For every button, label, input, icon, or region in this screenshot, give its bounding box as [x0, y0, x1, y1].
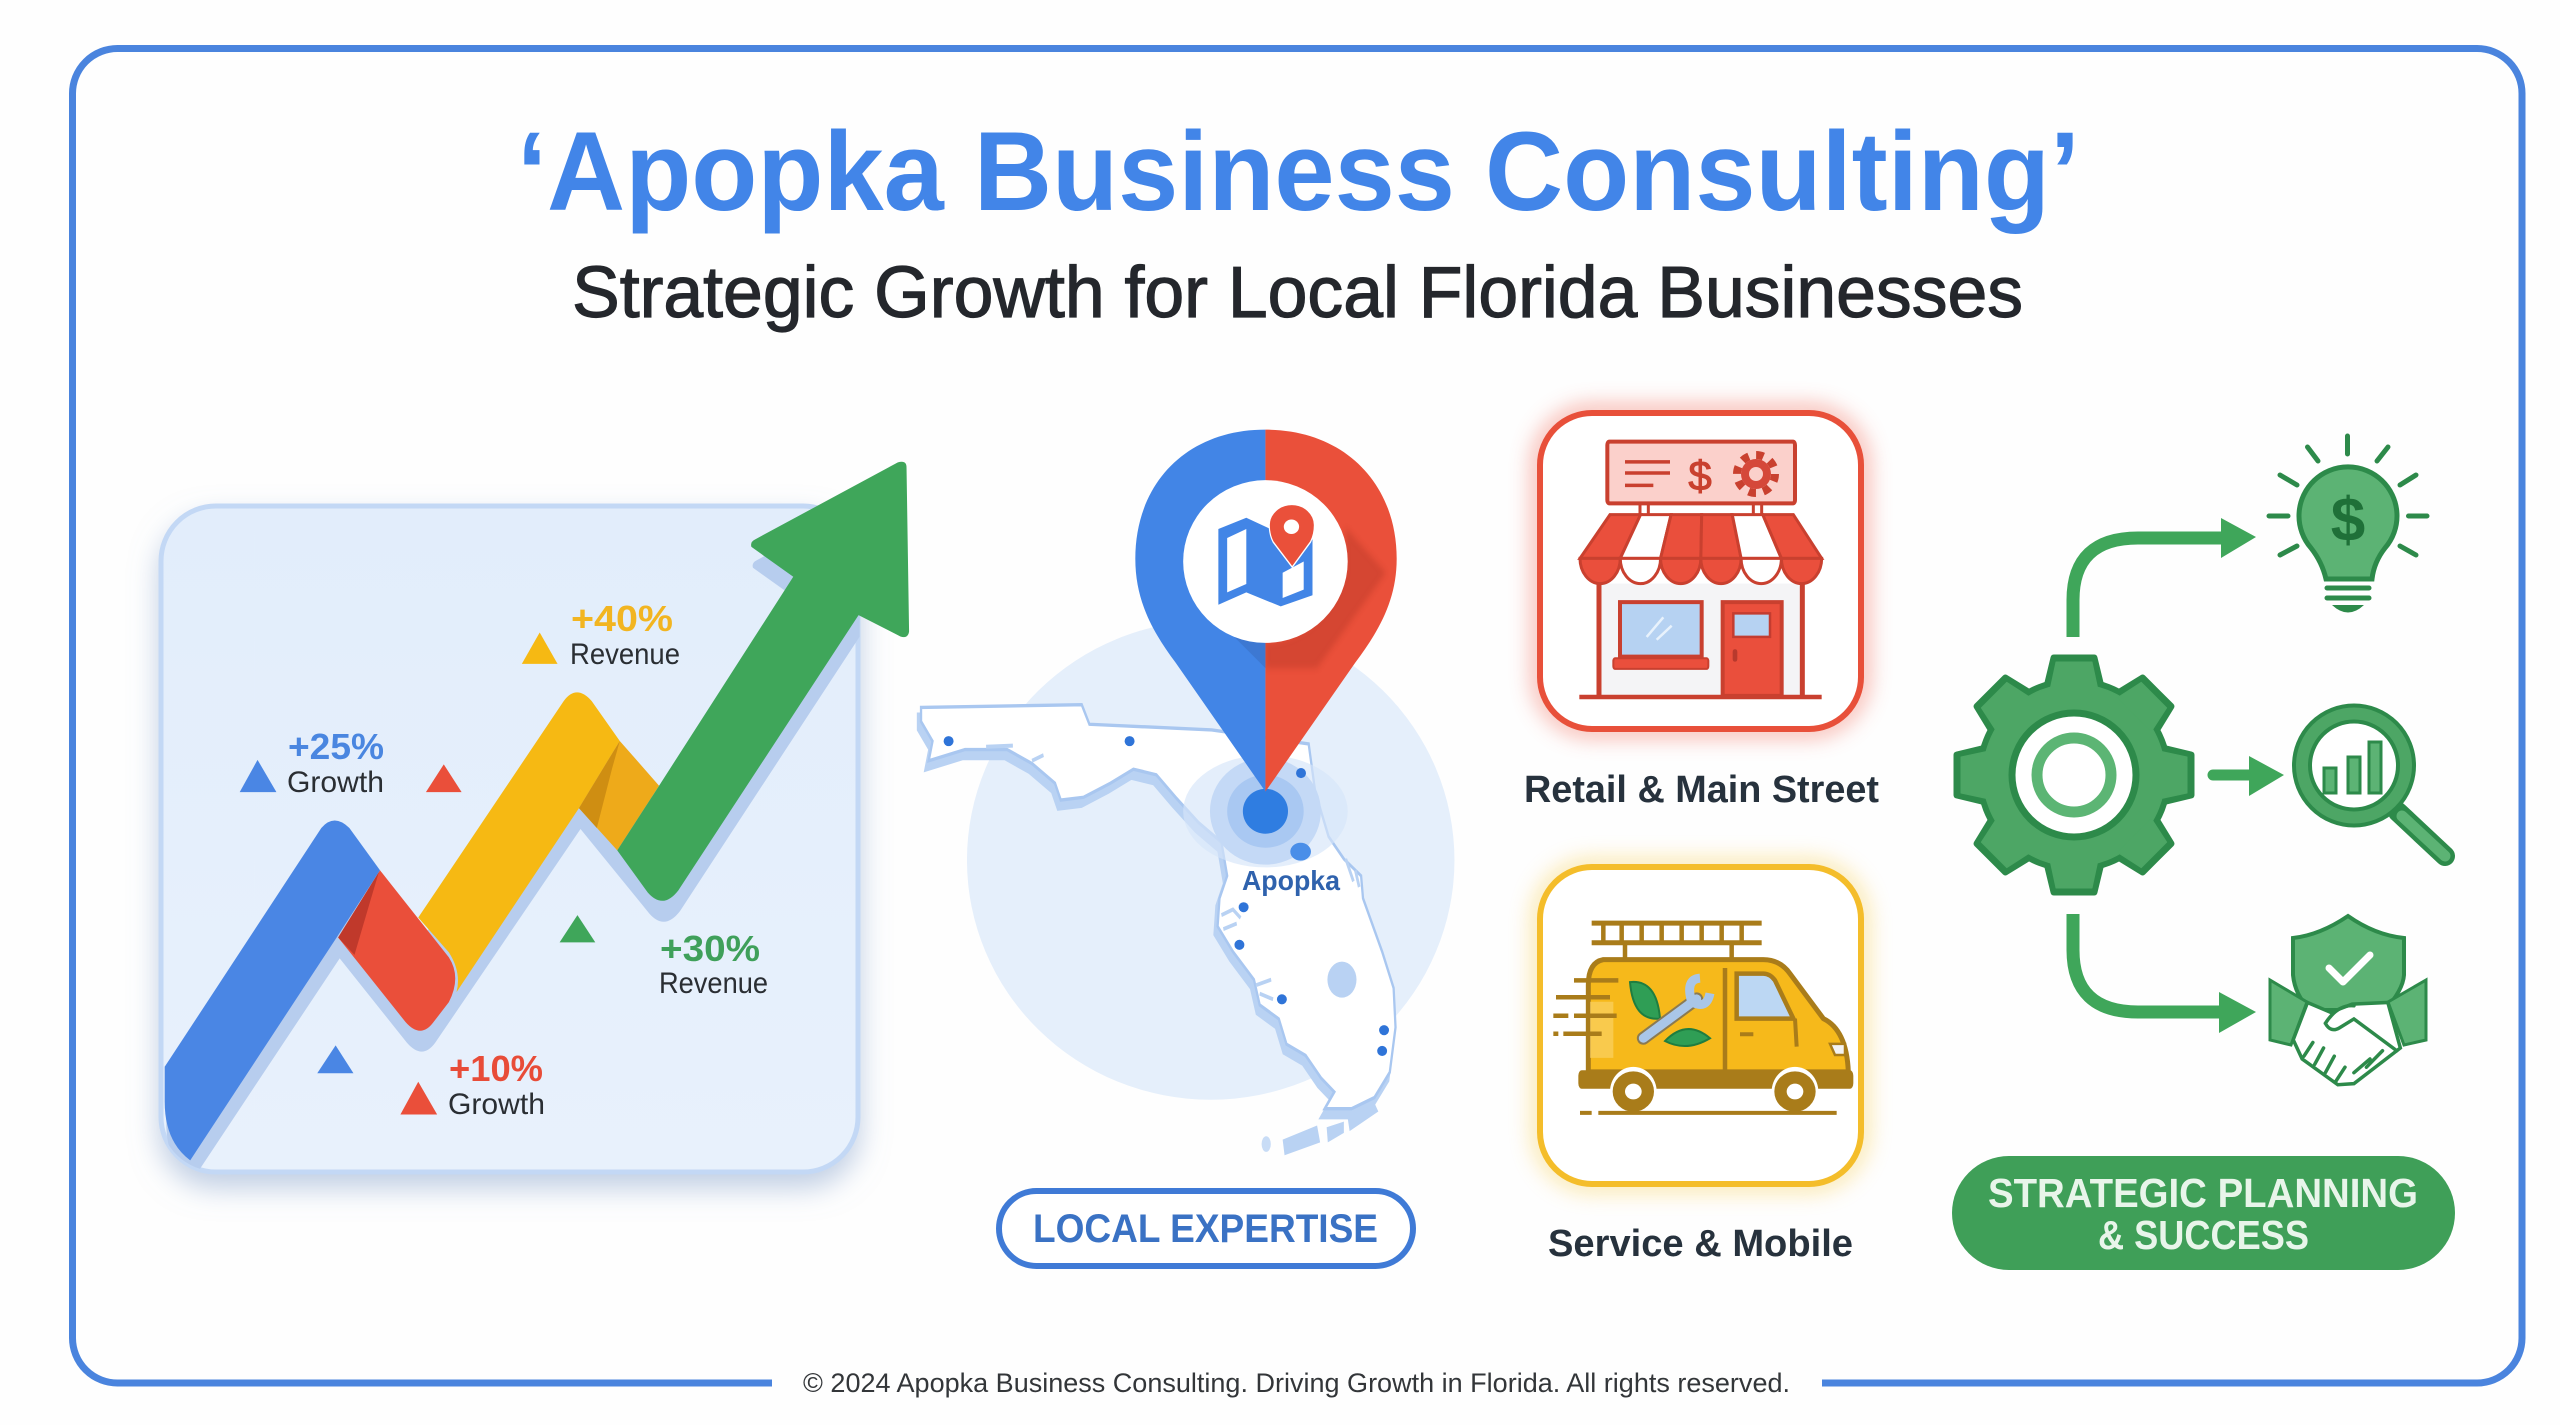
label: +25% growth: +25% [288, 726, 384, 767]
label: +10% growth: +10% [449, 1048, 543, 1089]
label: +40% revenue: Revenue [570, 638, 680, 671]
icon: storefront: $ [1688, 452, 1712, 499]
label: +25% growth [287, 726, 384, 799]
badge: local expertise: LOCAL EXPERTISE [1033, 1207, 1378, 1251]
arrow: across to analysis [2213, 756, 2284, 796]
label: +30% revenue [659, 928, 768, 1000]
label: +10% growth [448, 1048, 545, 1121]
rising ribbon arrow [165, 462, 911, 1181]
icon: central gear [1957, 658, 2191, 892]
service card [1540, 867, 1861, 1184]
location label: Apopka [1242, 865, 1340, 896]
icon: storefront [1579, 442, 1822, 697]
arrow: down to partnership [2073, 914, 2256, 1033]
icon: idea bulb with dollar: $ [2331, 486, 2365, 555]
footer: © 2024 Apopka Business Consulting. Driving Growth in Florida. All rights reserved. [803, 1368, 1790, 1398]
badge: local expertise [999, 1191, 1413, 1266]
subtitle: Strategic Growth for Local Florida Businesses [572, 253, 2023, 333]
label: +30% revenue: +30% [660, 928, 760, 969]
icon: magnifier with bars [2294, 706, 2445, 856]
label: +30% revenue: Revenue [659, 967, 768, 1000]
arrow: up to idea [2073, 518, 2256, 637]
icon: idea bulb with dollar [2269, 436, 2427, 612]
label: +40% revenue [570, 598, 680, 671]
small triangle markers [240, 632, 595, 1115]
panel: service and mobile [1540, 867, 1861, 1265]
title: ‘Apopka Business Consulting’ [517, 109, 2080, 234]
retail label: Retail & Main Street [1524, 769, 1879, 811]
badge: strategic planning and success [1952, 1156, 2455, 1270]
panel: growth chart [161, 462, 911, 1181]
label: +40% revenue: +40% [571, 598, 673, 639]
panel: local expertise map [919, 430, 1454, 1266]
label: +25% growth: Growth [287, 766, 384, 799]
service label: Service & Mobile [1548, 1223, 1853, 1265]
panel: strategic planning [1952, 436, 2455, 1270]
chart card background [161, 506, 858, 1172]
icon: map pin [1135, 430, 1397, 792]
badge: strategic planning and success: STRATEGIC PLANNING [1988, 1170, 2418, 1216]
icon: shield and handshake [2270, 916, 2426, 1085]
retail card [1540, 413, 1861, 729]
panel: retail and main street [1524, 413, 1879, 811]
label: +10% growth: Growth [448, 1088, 545, 1121]
icon: service van [1553, 923, 1853, 1116]
badge: strategic planning and success: & SUCCESS [2098, 1212, 2309, 1258]
florida map with radius circle [919, 620, 1454, 1155]
